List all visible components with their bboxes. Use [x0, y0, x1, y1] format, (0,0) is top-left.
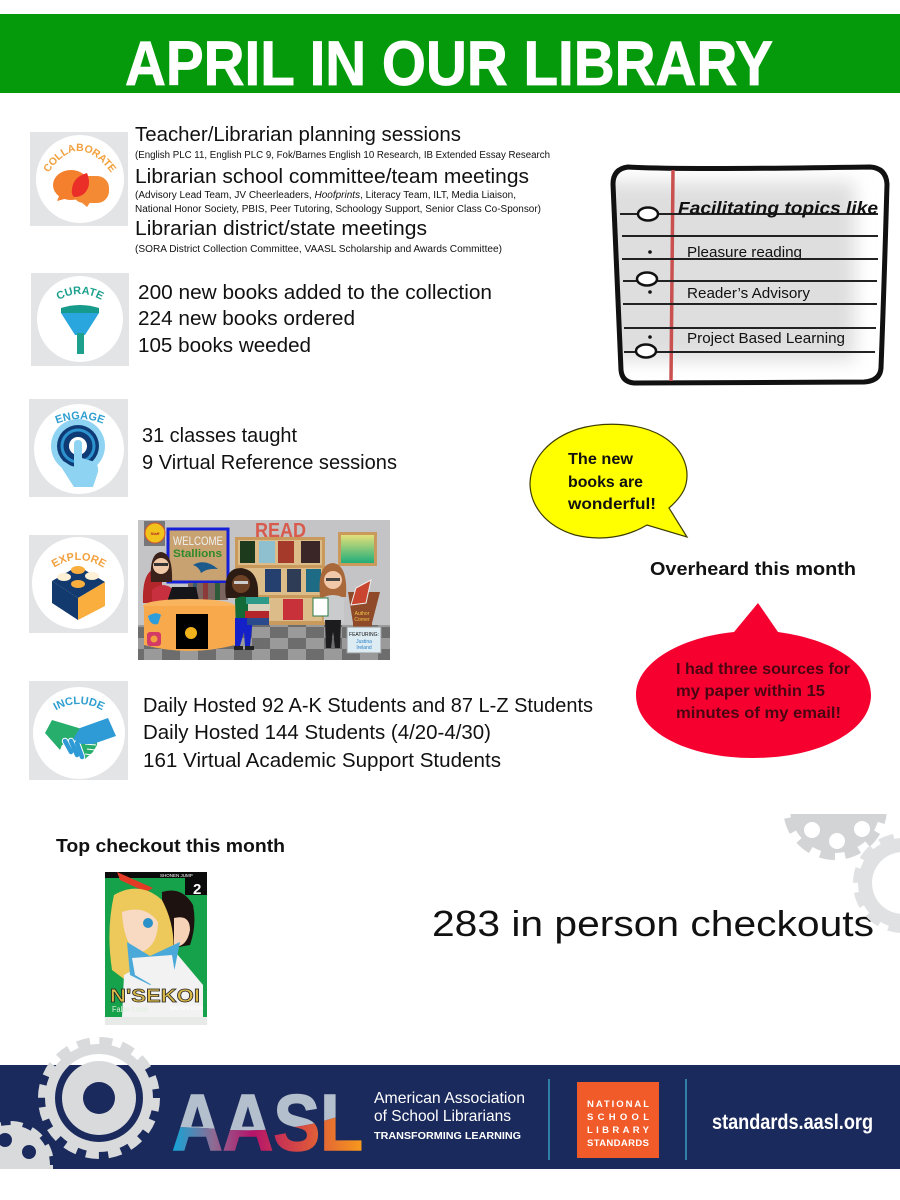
text block: collaborate: Librarian district/state meetings — [135, 218, 427, 240]
callout: yellow speech bubble: wonderful! — [567, 496, 656, 513]
notebook heading: Facilitating topics like — [678, 198, 878, 218]
text block: include — [143, 694, 593, 772]
decorative gears — [784, 814, 900, 933]
heading: top checkout this month: Top checkout this month — [56, 835, 285, 856]
text block: collaborate: (Advisory Lead Team, JV Cheerleaders, Hoofprints, Literacy Team, ILT, Media Liaison, — [135, 190, 516, 201]
image: book cover — [105, 872, 207, 1025]
icon: engage: ENGAGE — [55, 412, 105, 424]
notebook list — [687, 245, 845, 347]
image: virtual library scene — [138, 520, 390, 660]
image: virtual library scene: Ireland — [356, 645, 372, 651]
callout: yellow speech bubble — [530, 424, 687, 538]
callout: yellow speech bubble: books are — [568, 474, 643, 491]
image: book cover: False Love — [112, 1005, 148, 1014]
image: virtual library scene: Justina — [356, 639, 372, 645]
heading: overheard this month: Overheard this month — [650, 558, 856, 579]
logo: AASL: AASL — [172, 1078, 363, 1167]
image: book cover: N'SEKOI — [110, 986, 200, 1006]
callout: red speech bubble: minutes of my email! — [676, 705, 841, 722]
badge: national school library standards: LIBRARY — [587, 1125, 650, 1136]
image: virtual library scene: WELCOME — [173, 534, 223, 548]
text block: collaborate: National Honor Society, PBIS, Peer Tutoring, Schoology Support, Senior Class Co-Sponsor) — [135, 204, 541, 215]
image: virtual library scene: Stallions — [173, 548, 222, 560]
organisation name: American Association — [374, 1090, 525, 1107]
notebook list: Project Based Learning — [687, 331, 845, 347]
image: virtual library scene: Author — [355, 611, 370, 617]
badge: national school library standards: NATIONAL — [587, 1099, 649, 1110]
text block: collaborate — [135, 124, 550, 255]
icon: curate — [31, 273, 129, 366]
icon: include: INCLUDE — [53, 696, 105, 710]
callout: red speech bubble — [636, 603, 871, 758]
text block: include: Daily Hosted 144 Students (4/20-4/30) — [143, 721, 491, 744]
image: virtual library scene: FEATURING: — [349, 632, 379, 638]
text block: curate: 105 books weeded — [138, 334, 311, 357]
callout: red speech bubble: my paper within 15 — [676, 683, 825, 700]
icon: engage — [29, 399, 128, 497]
image: book cover: NAOSHI KOMI — [170, 1006, 203, 1012]
badge: national school library standards: STANDARDS — [587, 1138, 649, 1149]
callout: yellow speech bubble: The new — [568, 451, 634, 468]
icon: footer gears — [0, 1037, 160, 1169]
icon: explore — [29, 535, 128, 633]
image: virtual library scene: Corner — [354, 617, 370, 623]
image: book cover: SHONEN JUMP — [160, 873, 193, 878]
image: book cover: 2 — [193, 881, 201, 898]
text block: collaborate: Teacher/Librarian planning sessions — [135, 124, 461, 146]
text block: engage — [142, 424, 397, 474]
text block: include: Daily Hosted 92 A-K Students and 87 L-Z Students — [143, 694, 593, 717]
text block: include: 161 Virtual Academic Support Students — [143, 749, 501, 772]
website: standards.aasl.org — [712, 1111, 873, 1134]
image: virtual library scene: READ — [255, 520, 306, 542]
title banner — [0, 14, 900, 99]
text block: curate — [138, 281, 492, 357]
logo: AASL — [172, 1094, 362, 1152]
text block: curate: 200 new books added to the collection — [138, 281, 492, 304]
notebook panel: facilitating topics — [600, 167, 887, 383]
stat: in person checkouts: 283 in person checkouts — [432, 903, 874, 944]
logo: AASL: AASL — [172, 1078, 363, 1167]
text block: engage: 31 classes taught — [142, 424, 297, 447]
image: virtual library scene: Staff — [151, 531, 160, 536]
icon: include — [29, 681, 128, 780]
title: APRIL IN OUR LIBRARY — [125, 29, 773, 99]
organisation name — [374, 1090, 525, 1142]
text block: collaborate: Librarian school committee/team meetings — [135, 166, 529, 188]
organisation name: of School Librarians — [374, 1108, 511, 1125]
footer band — [0, 1037, 900, 1169]
icon: collaborate: COLLABORATE — [44, 144, 116, 173]
badge: national school library standards — [577, 1082, 659, 1158]
icon: curate: CURATE — [56, 286, 104, 300]
badge: national school library standards: SCHOOL — [587, 1112, 649, 1123]
text block: collaborate: (SORA District Collection Committee, VAASL Scholarship and Awards Committee) — [135, 244, 502, 255]
icon: explore: EXPLORE — [51, 552, 107, 568]
text block: engage: 9 Virtual Reference sessions — [142, 451, 397, 474]
notebook list: Reader’s Advisory — [687, 286, 811, 302]
icon: collaborate — [30, 132, 128, 226]
callout: red speech bubble: I had three sources for — [676, 661, 850, 678]
text block: collaborate: (English PLC 11, English PLC 9, Fok/Barnes English 10 Research, IB Extended Essay Research — [135, 150, 550, 161]
organisation name: TRANSFORMING LEARNING — [374, 1131, 521, 1142]
text block: curate: 224 new books ordered — [138, 307, 355, 330]
notebook list: Pleasure reading — [687, 245, 802, 261]
